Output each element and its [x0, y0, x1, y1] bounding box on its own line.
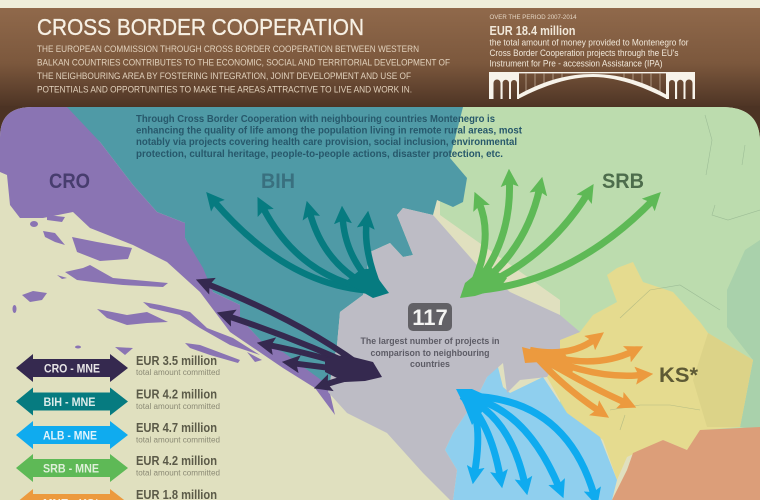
label: KS*: KS* [659, 364, 699, 387]
label: BIH: BIH [261, 170, 295, 193]
intro paragraph: enhancing the quality of life among the population living in remote rural areas, most [136, 126, 522, 136]
legend row: CRO - MNE: EUR 3.5 million [136, 354, 217, 368]
legend row: ALB - MNE: EUR 4.7 million [136, 421, 217, 435]
header band [0, 8, 760, 108]
project count caption: comparison to neighbouring [370, 348, 490, 359]
funding callout: the total amount of money provided to Montenegro for [490, 38, 689, 48]
intro text block: THE EUROPEAN COMMISSION THROUGH CROSS BORDER COOPERATION BETWEEN WESTERN [37, 44, 419, 55]
intro paragraph: Through Cross Border Cooperation with neighbouring countries Montenegro is [136, 114, 495, 125]
map region: Croatia [0, 107, 335, 415]
map region: North Macedonia [612, 427, 760, 500]
arrows: KS [522, 339, 642, 412]
legend row: SRB - MNE: total amount committed [136, 468, 220, 478]
map region: Kosovo east shade [693, 333, 753, 427]
intro text block [37, 44, 450, 96]
intro paragraph: notably via projects covering health care provision, social inclusion, environmental [136, 137, 517, 148]
project count caption: The largest number of projects in [360, 336, 500, 347]
arrows: ALB [456, 389, 594, 495]
label: CRO: CRO [49, 170, 90, 193]
legend row: BIH - MNE: BIH - MNE [44, 397, 96, 409]
map [0, 107, 760, 500]
arrows: SRB [460, 180, 653, 298]
legend row: BIH - MNE: total amount committed [136, 402, 220, 411]
project count caption: countries [410, 359, 450, 370]
legend row: BIH - MNE: EUR 4.2 million [136, 388, 217, 402]
intro text block: POTENTIALS AND OPPORTUNITIES TO MAKE THE AREAS ATTRACTIVE TO LIVE AND WORK IN. [37, 84, 412, 96]
funding callout: EUR 18.4 million [490, 23, 576, 38]
legend row: MNE - KS* [20, 489, 216, 500]
funding callout: Instrument for Pre - accession Assistance (IPA) [490, 58, 663, 68]
project count caption [360, 338, 499, 367]
label: SRB: SRB [602, 170, 644, 193]
project count badge: 117 [412, 305, 448, 330]
legend row: ALB - MNE [16, 421, 220, 449]
legend row: CRO - MNE [16, 354, 220, 382]
legend row: CRO - MNE: CRO - MNE [44, 364, 100, 376]
funding callout: OVER THE PERIOD 2007-2014 [490, 14, 577, 21]
funding callout: Cross Border Cooperation projects through the EU's [490, 48, 679, 58]
arrows: BIH [214, 201, 389, 298]
icon: bridge [489, 72, 695, 99]
arrows: CRO [206, 284, 382, 385]
map region: Serbia [440, 107, 760, 430]
legend row: SRB - MNE: SRB - MNE [43, 464, 99, 476]
legend row: ALB - MNE: ALB - MNE [43, 430, 97, 442]
legend row: SRB - MNE [16, 454, 220, 482]
map region: Albania [445, 363, 617, 500]
map region: Bosnia and Herzegovina [60, 107, 467, 392]
intro text block: THE NEIGHBOURING AREA BY FOSTERING INTEGRATION, JOINT DEVELOPMENT AND USE OF [37, 71, 411, 82]
map region: eastern Serbia shade [727, 240, 760, 430]
map region: sea and coast [0, 107, 760, 500]
intro text block: BALKAN COUNTRIES CONTRIBUTES TO THE ECONOMIC, SOCIAL AND TERRITORIAL DEVELOPMENT OF [37, 58, 450, 68]
map region: Kosovo [547, 262, 753, 480]
title: CROSS BORDER COOPERATION [37, 14, 364, 40]
map region: Montenegro [328, 208, 580, 500]
legend row: BIH - MNE [16, 388, 220, 416]
intro paragraph: protection, cultural heritage, people-to-people actions, disaster protection, etc. [136, 149, 503, 160]
funding callout [490, 14, 689, 68]
intro paragraph [136, 114, 522, 160]
legend row: CRO - MNE: total amount committed [136, 368, 220, 377]
legend row: SRB - MNE: EUR 4.2 million [136, 454, 217, 468]
legend row: ALB - MNE: total amount committed [136, 436, 220, 444]
